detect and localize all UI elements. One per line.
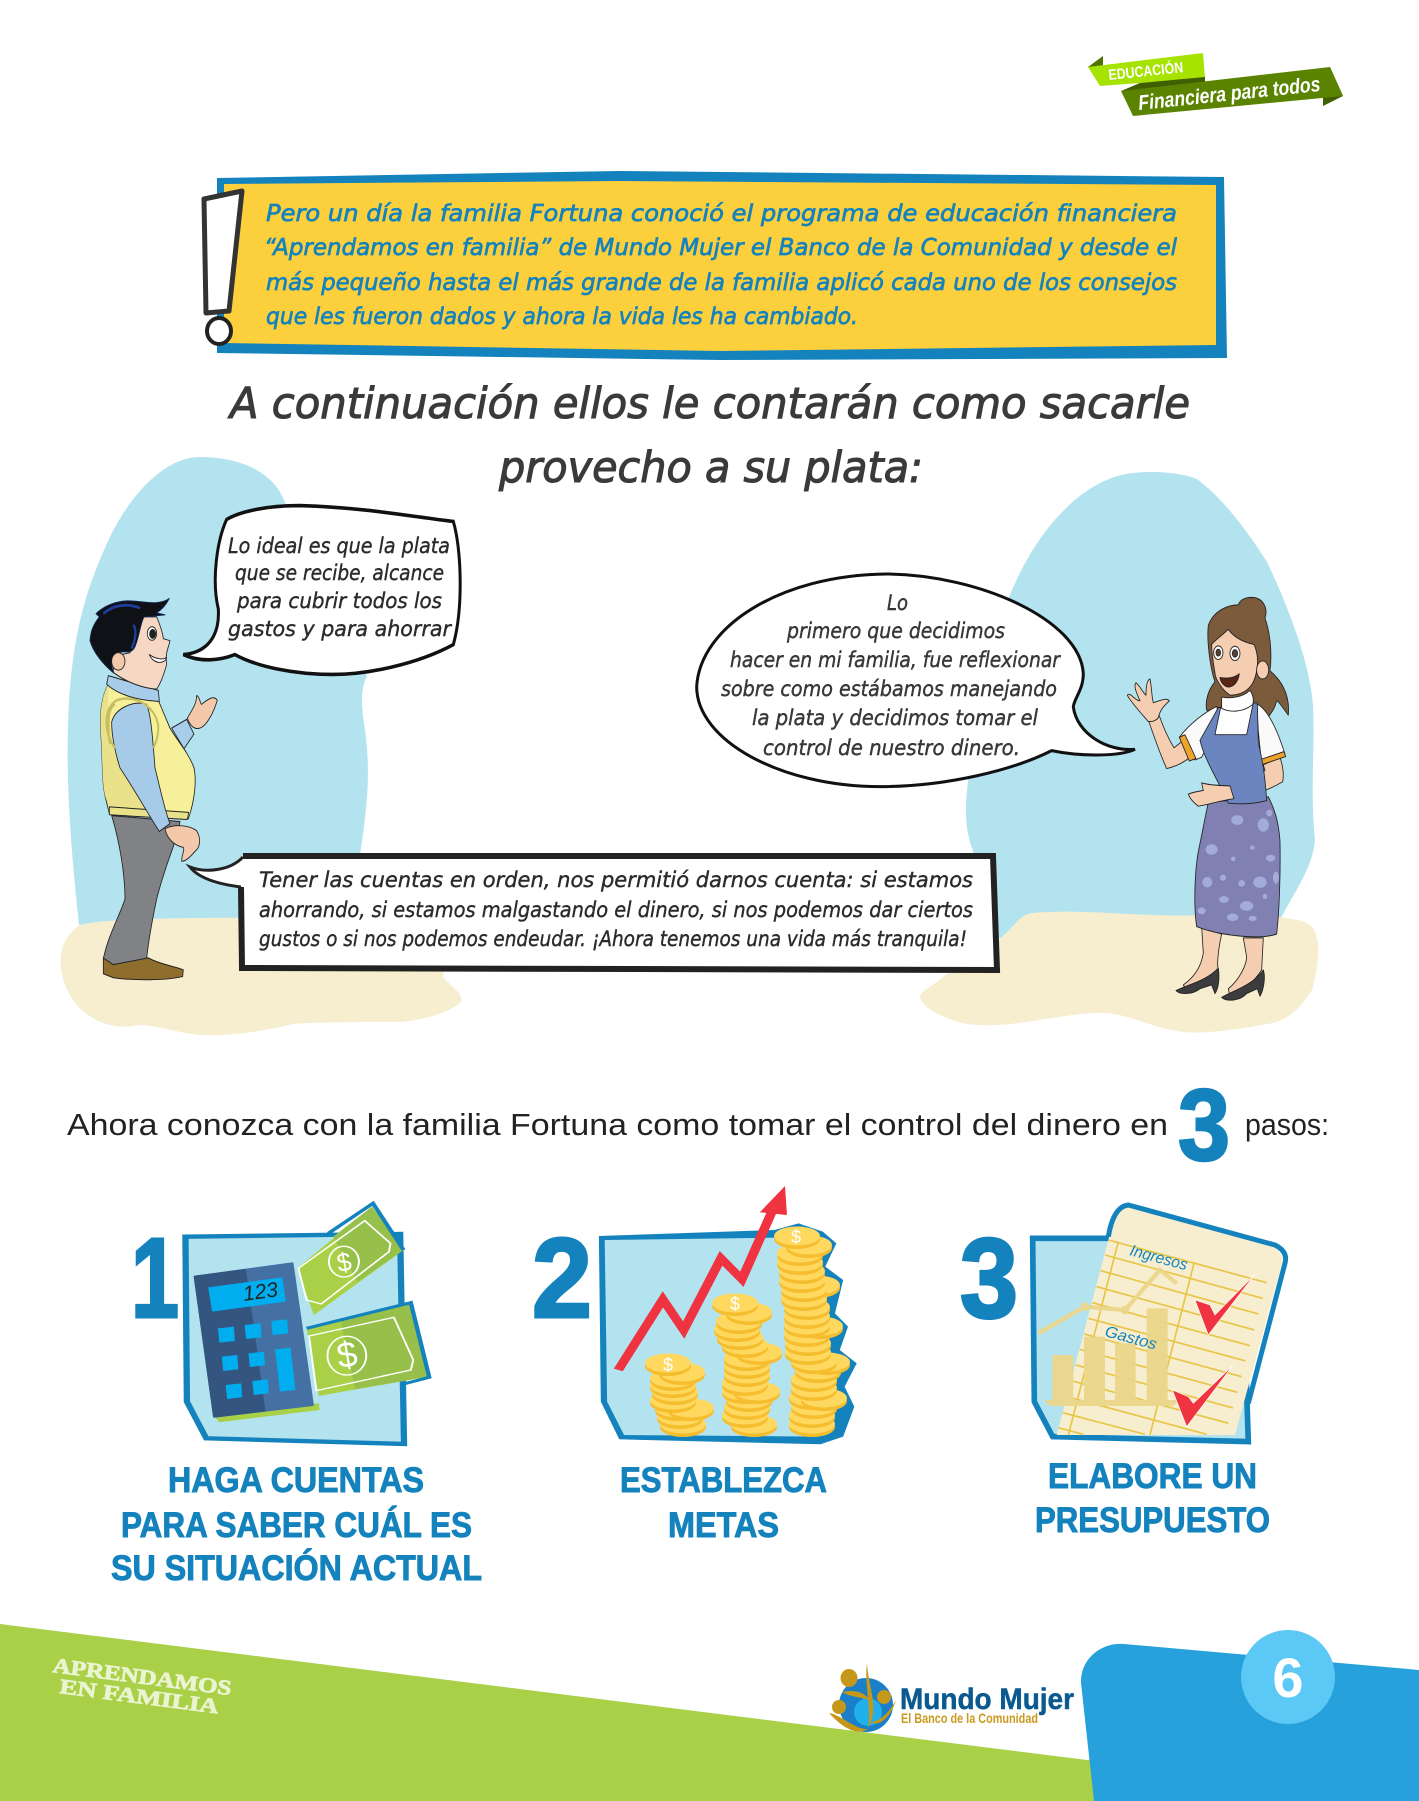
intro text: que les fueron dados y ahora la vida les ha cambiado. (266, 304, 858, 330)
speech bubble: woman (697, 574, 1135, 787)
woman hair back (1206, 597, 1289, 718)
speech bubble: man bottom: Tener las cuentas en orden, nos permitió darnos cuenta: si estamos (259, 868, 973, 892)
background blob: left sand (61, 918, 461, 1035)
icon: coins and rising arrow (599, 1186, 857, 1444)
woman collar (1222, 690, 1253, 711)
red arrow (618, 1186, 787, 1370)
label: METAS (668, 1506, 779, 1545)
coin stack short: $ (663, 1355, 673, 1375)
woman eyes and mouth (1214, 646, 1240, 687)
woman blouse sleeves (1179, 704, 1285, 764)
icon: calculator and bills: $ (333, 1333, 360, 1376)
number 3: 3 (960, 1215, 1018, 1341)
heading (227, 379, 1190, 493)
background blob: right sand (920, 912, 1318, 1033)
heading: A continuación ellos le contarán como sacarle (227, 379, 1190, 429)
woman ear (1257, 661, 1269, 679)
man eye and mouth (147, 627, 167, 662)
man collar (107, 676, 159, 701)
intro text (264, 201, 1178, 330)
man ear (112, 653, 125, 670)
man vest (100, 684, 195, 819)
intro text: más pequeño hasta el más grande de la familia aplicó cada uno de los consejos (266, 270, 1177, 296)
speech bubble: man top: Lo ideal es que la plata (228, 534, 450, 558)
speech bubble: woman: sobre como estábamos manejando (721, 677, 1057, 701)
intro line: tres pasos: Ahora conozca con la familia Fortuna como tomar el control del dinero en (67, 1107, 1168, 1142)
label: HAGA CUENTAS (168, 1461, 424, 1500)
step 1 (111, 1203, 482, 1588)
speech bubble: woman: control de nuestro dinero. (763, 736, 1020, 760)
man vest armhole (106, 699, 158, 748)
label (620, 1461, 827, 1545)
woman raised arm (1148, 716, 1190, 769)
speech bubble: woman: Lo (887, 591, 908, 615)
banknote bottom (307, 1303, 429, 1396)
woman legs (1183, 927, 1263, 996)
coin stack medium: $ (730, 1294, 740, 1314)
speech bubble: man top (183, 506, 460, 674)
man face (113, 617, 170, 689)
woman lower hand (1188, 783, 1234, 806)
checkmarks (1172, 1274, 1255, 1427)
speech bubble: man top: que se recibe, alcance (235, 561, 444, 585)
chart on sheet (1038, 1270, 1180, 1406)
man shoes (103, 958, 183, 980)
speech bubble: woman: la plata y decidimos tomar el (752, 706, 1038, 730)
intro line: tres pasos: 3 (1178, 1070, 1230, 1182)
woman bib neck (1215, 703, 1253, 735)
banknote top (297, 1203, 404, 1315)
label (111, 1461, 482, 1588)
ribbon logo: educación financiera para todos: Financiera para todos (1137, 73, 1322, 115)
woman apron (1200, 703, 1267, 804)
programme name: EN FAMILIA (58, 1674, 221, 1719)
footer: blue corner panel (1081, 1644, 1419, 1801)
label (1035, 1457, 1270, 1540)
logo tagline: El Banco de la Comunidad (901, 1710, 1038, 1726)
man vest shading and hem (100, 684, 150, 814)
coin stack medium (712, 1294, 782, 1437)
page number (1241, 1630, 1335, 1724)
man raised arm (172, 719, 194, 749)
woman skirt (1195, 797, 1280, 937)
intro line: tres pasos: pasos: (1245, 1107, 1329, 1142)
woman face (1212, 629, 1258, 695)
logo wordmark: Mundo Mujer (900, 1683, 1074, 1716)
icon: budget sheet: Ingresos (1128, 1242, 1189, 1274)
man lower hand (165, 826, 200, 861)
coin stack tall: $ (791, 1227, 801, 1247)
label: PRESUPUESTO (1035, 1501, 1270, 1540)
heading: provecho a su plata: (498, 443, 923, 493)
coin stack short (645, 1354, 714, 1437)
number 1: 1 (131, 1215, 179, 1341)
woman shoes (1176, 968, 1264, 1000)
woman raised hand (1127, 679, 1169, 722)
man hair (90, 599, 169, 673)
icon: calculator and bills (185, 1203, 429, 1444)
woman sleeve trim (1179, 735, 1286, 765)
ribbon logo: educación financiera para todos: EDUCACIÓN (1108, 58, 1184, 84)
programme name: APRENDAMOS (51, 1653, 233, 1700)
character: woman (1127, 597, 1289, 1000)
speech bubble: man bottom: ahorrando, si estamos malgastando el dinero, si nos podemos dar ciertos (259, 898, 973, 922)
label: ELABORE UN (1048, 1457, 1257, 1496)
icon: exclamation mark (204, 191, 242, 344)
icon: calculator and bills: $ (334, 1246, 354, 1278)
intro line: tres pasos (67, 1070, 1329, 1182)
speech bubble: man bottom: gustos o si nos podemos endeudar. ¡Ahora tenemos una vida más tranquila! (259, 927, 967, 951)
intro text: “Aprendamos en familia” de Mundo Mujer el Banco de la Comunidad y desde el (264, 235, 1178, 261)
woman skirt spots (1198, 810, 1279, 921)
coin stack tall (774, 1226, 850, 1437)
background blob: right blue (966, 472, 1315, 938)
step 3 (960, 1205, 1286, 1540)
speech bubble: woman: primero que decidimos (786, 619, 1005, 643)
page number: 6 (1272, 1646, 1304, 1709)
programme name (51, 1653, 233, 1719)
background blob: left blue (68, 457, 368, 925)
icon: calculator and bills: 123 (241, 1278, 280, 1306)
icon: budget sheet: Gastos (1103, 1323, 1159, 1354)
callout: yellow intro panel (204, 171, 1227, 360)
speech bubble: man top: gastos y para ahorrar (228, 617, 452, 641)
label: SU SITUACIÓN ACTUAL (111, 1548, 482, 1588)
speech bubble: woman: hacer en mi familia, fue reflexionar (730, 648, 1061, 672)
label: ESTABLEZCA (620, 1461, 827, 1500)
speech bubble: man bottom (190, 856, 997, 970)
intro text: Pero un día la familia Fortuna conoció el programa de educación financiera (266, 201, 1177, 227)
logo: Mundo Mujer (829, 1663, 1074, 1732)
character: man (90, 599, 217, 980)
speech bubble: man top: para cubrir todos los (236, 589, 442, 613)
man raised hand (187, 696, 217, 729)
woman right upper arm (1230, 757, 1283, 799)
label: PARA SABER CUÁL ES (121, 1505, 472, 1545)
step 2 (532, 1186, 857, 1545)
logo icon (829, 1663, 896, 1732)
man trousers (103, 816, 180, 967)
man hair highlights (103, 605, 140, 649)
footer: green band (0, 1624, 1100, 1801)
man sleeve (112, 703, 170, 831)
icon: budget sheet (1033, 1205, 1286, 1442)
ribbon logo: educación financiera para todos (1088, 53, 1343, 116)
number 2: 2 (532, 1215, 592, 1341)
